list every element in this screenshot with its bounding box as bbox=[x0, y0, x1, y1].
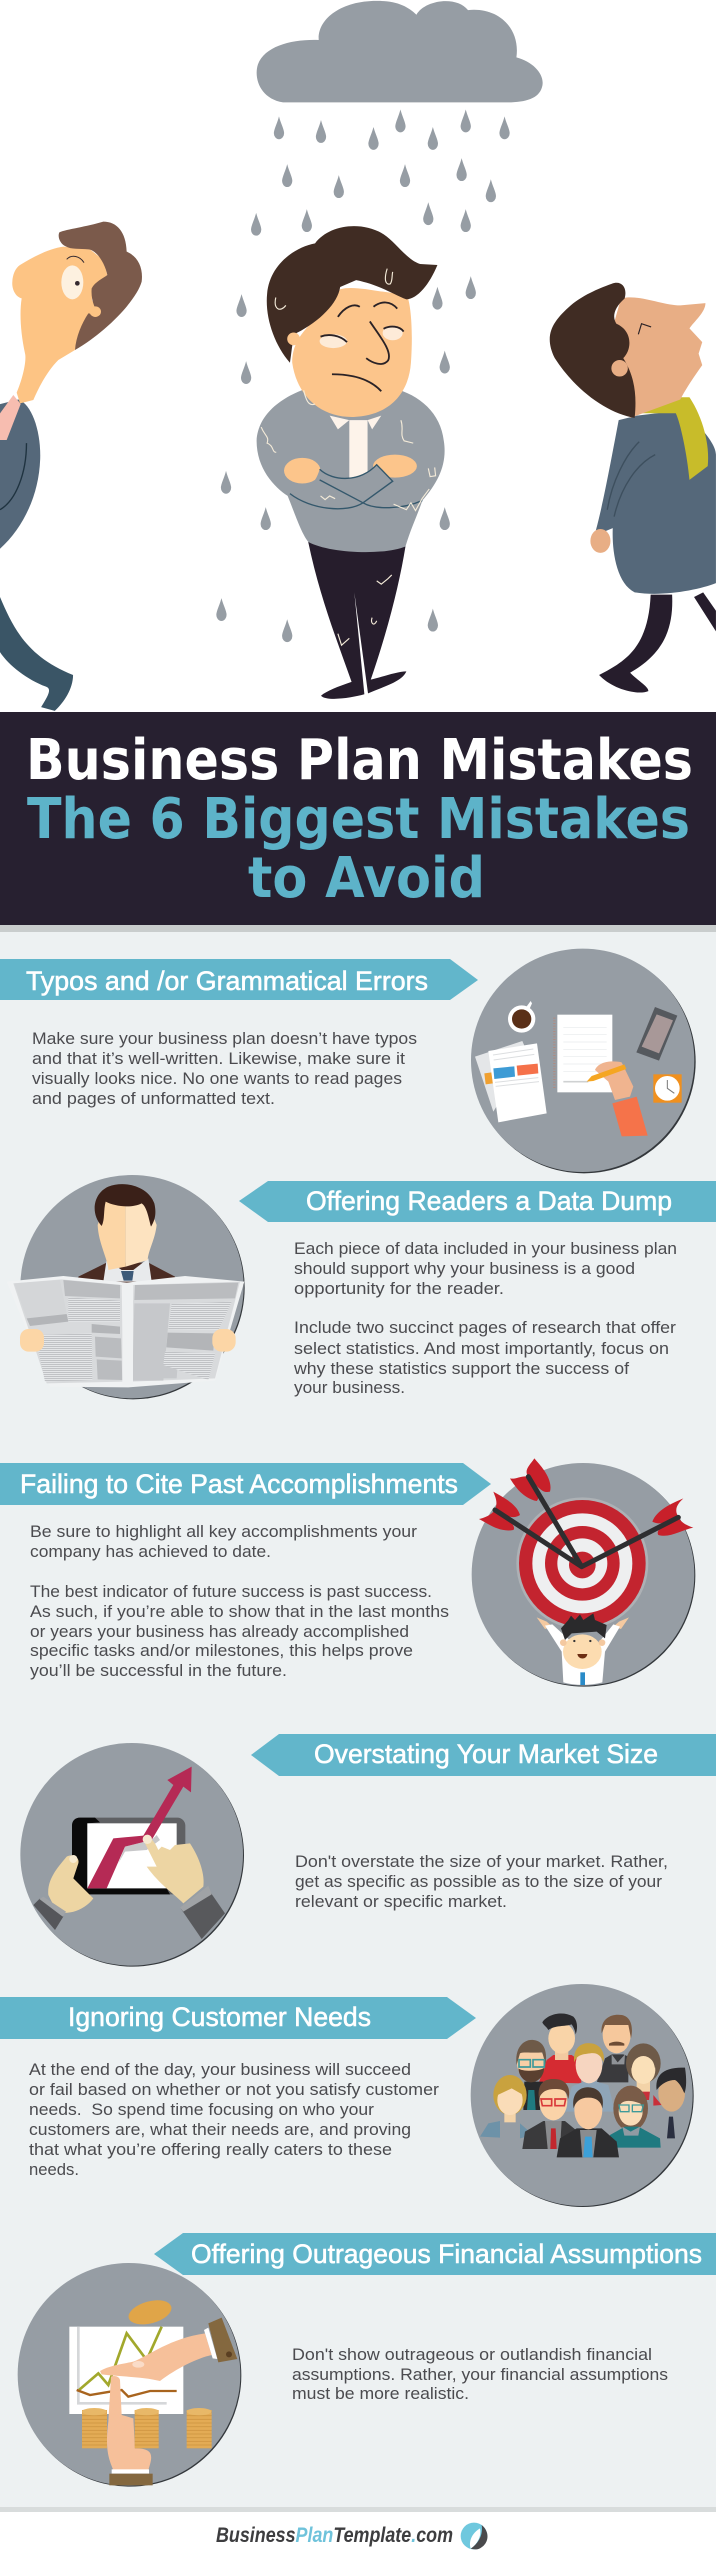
ribbon heading bbox=[0, 1463, 491, 1505]
body text: and pages of unformatted text. bbox=[32, 1089, 275, 1108]
body text: or years your business has already accomplished bbox=[30, 1622, 409, 1641]
panel: offering readers a data dump bbox=[7, 1175, 716, 1399]
ribbon heading: Overstating Your Market Size bbox=[314, 1739, 658, 1769]
figure: man looking up at left bbox=[0, 222, 142, 711]
body text: and that it’s well-written. Likewise, make sure it bbox=[32, 1049, 405, 1068]
title banner bbox=[0, 712, 716, 2507]
ribbon heading: Offering Outrageous Financial Assumptions bbox=[191, 2239, 702, 2269]
panel: offering outrageous financial assumptions bbox=[18, 2233, 716, 2487]
body text: company has achieved to date. bbox=[30, 1542, 271, 1561]
body text: Each piece of data included in your business plan bbox=[294, 1239, 677, 1258]
body text: At the end of the day, your business will succeed bbox=[29, 2060, 411, 2079]
body text: needs. So spend time focusing on who your bbox=[29, 2100, 374, 2119]
body text: needs. bbox=[29, 2160, 79, 2179]
body text bbox=[292, 2345, 668, 2403]
body text: opportunity for the reader. bbox=[294, 1279, 504, 1298]
body text: select statistics. And most importantly, focus on bbox=[294, 1339, 669, 1358]
ribbon heading: Typos and /or Grammatical Errors bbox=[26, 966, 428, 996]
body text: specific tasks and/or milestones, this helps prove bbox=[30, 1641, 413, 1660]
ribbon heading bbox=[239, 1181, 716, 1222]
icon: rain drops bbox=[217, 112, 509, 642]
icon: man reading newspaper bbox=[7, 1175, 245, 1399]
body text bbox=[295, 1852, 668, 1911]
panel: typos and grammatical errors bbox=[0, 949, 696, 1173]
icon: target with arrows and man bbox=[472, 1458, 695, 1687]
panel: failing to cite past accomplishments bbox=[0, 1458, 695, 1687]
body text: Don't show outrageous or outlandish financial bbox=[292, 2345, 652, 2364]
logo wordmark: BusinessPlanTemplate.com bbox=[216, 2524, 453, 2547]
icon: rain cloud bbox=[257, 1, 543, 102]
body text: Be sure to highlight all key accomplishments your bbox=[30, 1522, 417, 1541]
body text: assumptions. Rather, your financial assumptions bbox=[292, 2365, 668, 2384]
ribbon heading: Failing to Cite Past Accomplishments bbox=[20, 1469, 458, 1499]
body text: that what you’re offering really caters to these bbox=[29, 2140, 392, 2159]
body text: Make sure your business plan doesn’t have typos bbox=[32, 1029, 417, 1048]
body text: customers are, what their needs are, and proving bbox=[29, 2120, 411, 2139]
ribbon heading bbox=[154, 2233, 716, 2275]
icon: tablet with rising arrow bbox=[20, 1743, 244, 1967]
ribbon heading: Offering Readers a Data Dump bbox=[306, 1186, 672, 1216]
body text bbox=[30, 1522, 449, 1680]
panel: overstating your market size bbox=[20, 1734, 716, 1967]
icon: logo pen nib bbox=[461, 2523, 487, 2549]
body text: The best indicator of future success is past success. bbox=[30, 1582, 432, 1601]
body text: visually looks nice. No one wants to read pages bbox=[32, 1069, 402, 1088]
body text bbox=[32, 1029, 417, 1108]
body text: get as specific as possible as to the size of your bbox=[295, 1872, 662, 1891]
body text: Include two succinct pages of research that offer bbox=[294, 1318, 676, 1337]
ribbon heading: Ignoring Customer Needs bbox=[68, 2002, 371, 2032]
figure: man with nose up at right bbox=[550, 283, 716, 693]
body text bbox=[29, 2060, 439, 2179]
body text: should support why your business is a good bbox=[294, 1259, 635, 1278]
ribbon heading bbox=[0, 1997, 476, 2039]
ribbon heading bbox=[0, 959, 478, 1000]
subtitle line: to Avoid: to Avoid bbox=[248, 846, 485, 911]
body text bbox=[293, 1239, 677, 1397]
body text: relevant or specific market. bbox=[295, 1892, 507, 1911]
body text: you’ll be successful in the future. bbox=[30, 1661, 287, 1680]
body text: your business. bbox=[294, 1378, 405, 1397]
icon: desk with notebook and pencil bbox=[471, 949, 696, 1173]
body text: Don't overstate the size of your market. Rather, bbox=[295, 1852, 668, 1871]
body text: must be more realistic. bbox=[292, 2384, 469, 2403]
footer bbox=[0, 2507, 716, 2549]
hero illustration: man under a rain cloud bbox=[217, 1, 716, 699]
icon: group of customers bbox=[471, 1984, 694, 2207]
body text: why these statistics support the success of bbox=[293, 1359, 629, 1378]
ribbon heading bbox=[251, 1734, 716, 1776]
panel: ignoring customer needs bbox=[0, 1984, 694, 2207]
figure: sad man in the centre bbox=[257, 226, 445, 699]
body text: or fail based on whether or not you satisfy customer bbox=[29, 2080, 439, 2099]
body text: As such, if you’re able to show that in the last months bbox=[30, 1602, 449, 1621]
icon: money hands over chart bbox=[18, 2263, 241, 2487]
